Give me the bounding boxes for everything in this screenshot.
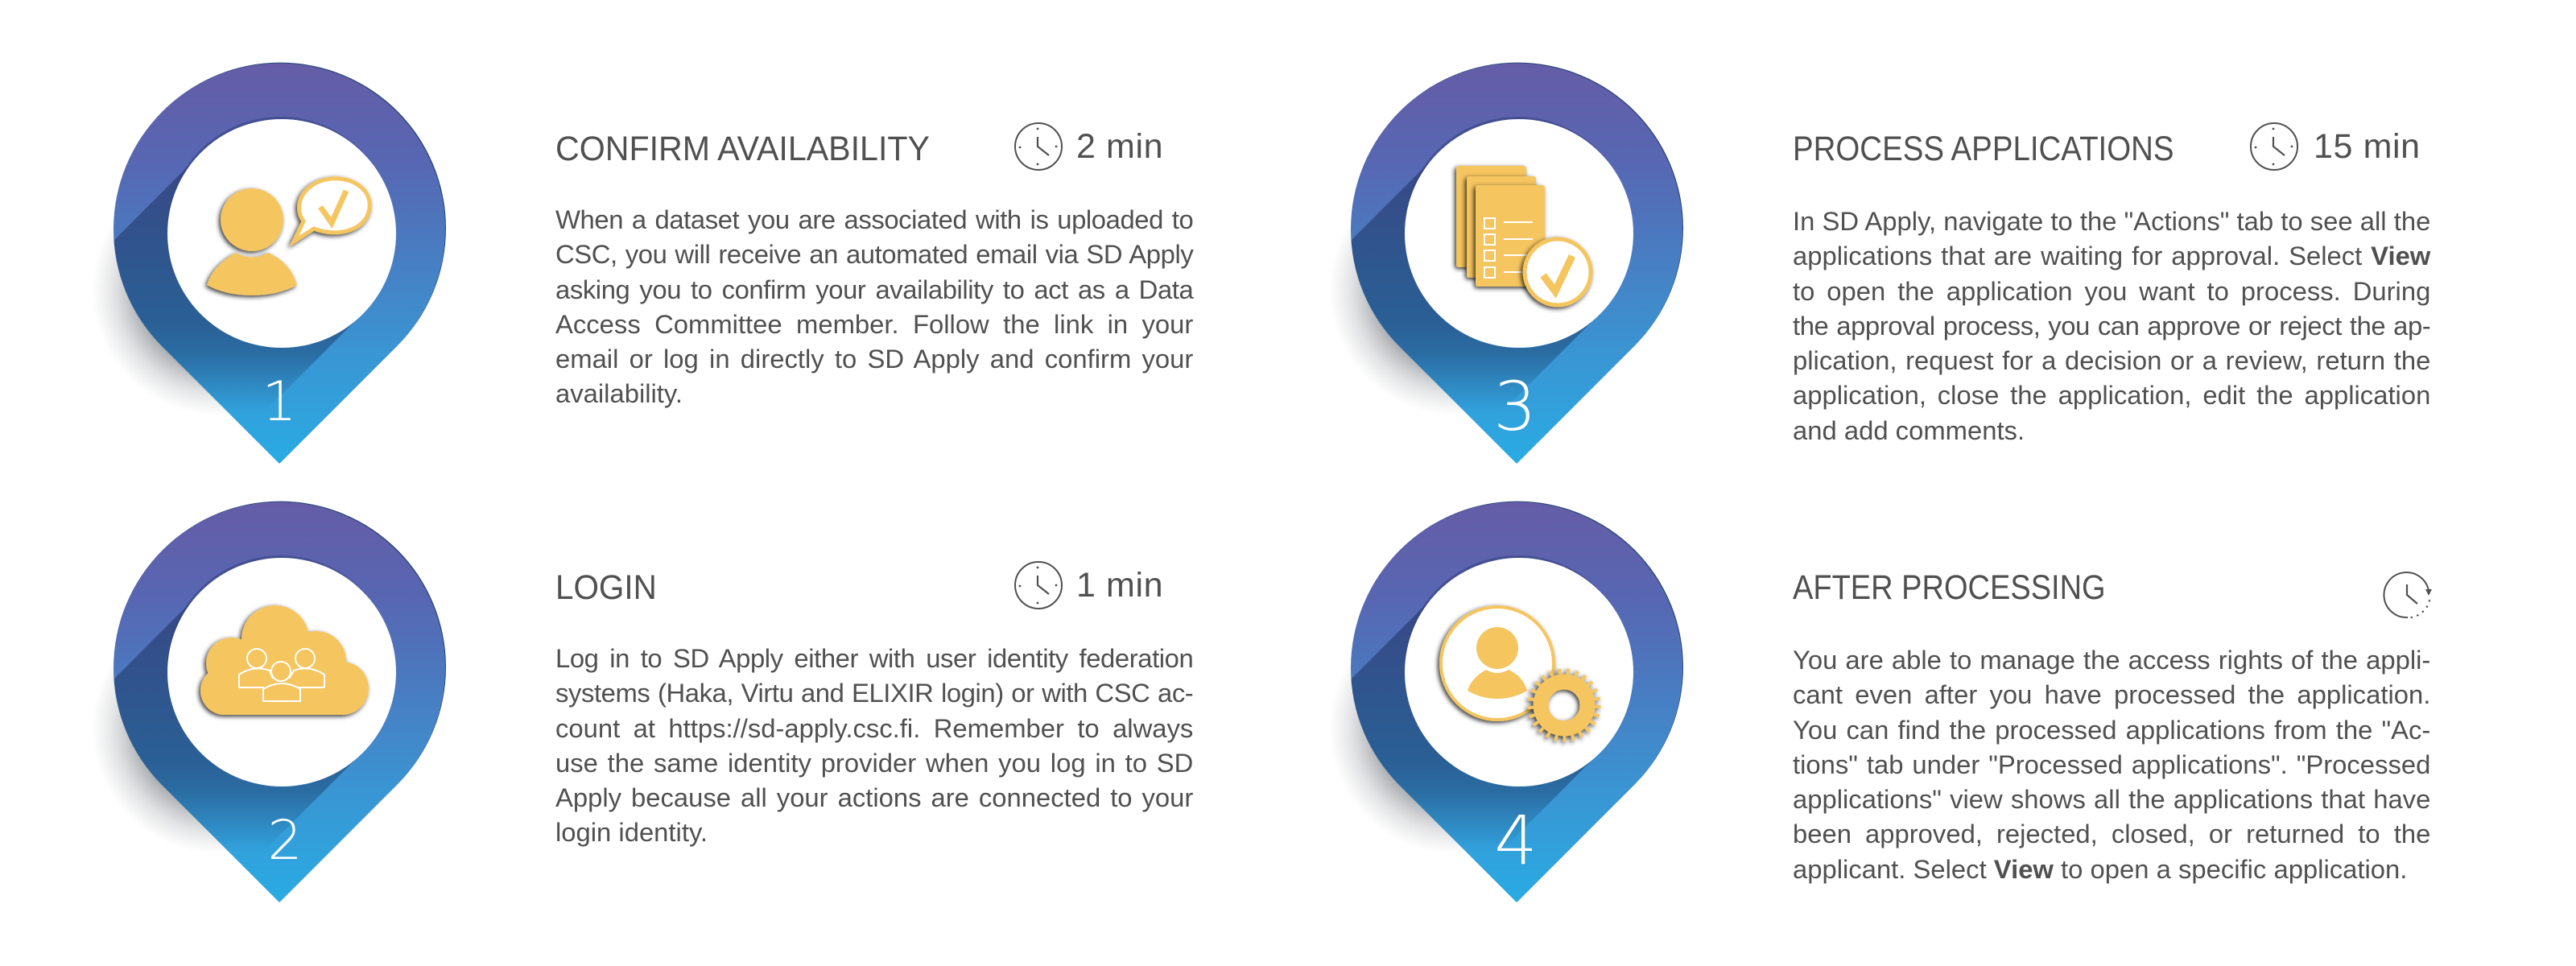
heading: LOGIN — [555, 568, 657, 607]
text block: plication, request for a decision or a review, return the — [1793, 346, 2430, 375]
text block: You can find the processed applications from the "Ac- — [1793, 716, 2430, 745]
number 1: 1 — [262, 370, 297, 434]
heading: AFTER PROCESSING — [1793, 568, 2106, 607]
heading: PROCESS APPLICATIONS — [1793, 130, 2174, 168]
time estimate: 2 min — [1076, 127, 1163, 166]
pin: step 2 — [98, 501, 446, 902]
text block: email or log in directly to SD Apply and confirm your — [555, 345, 1193, 374]
pin: step 4 — [1336, 501, 1683, 902]
text block: systems (Haka, Virtu and ELIXIR login) or with CSC ac- — [555, 679, 1193, 708]
text block: applicant. Select View to open a specific application. — [1793, 855, 2407, 884]
icon: cloud with people — [200, 605, 369, 715]
text block: In SD Apply, navigate to the "Actions" tab to see all the — [1793, 207, 2430, 236]
icon: clock — [1014, 122, 1063, 171]
text block: count at https://sd-apply.csc.fi. Remember to always — [555, 714, 1193, 743]
heading: CONFIRM AVAILABILITY — [555, 130, 930, 168]
panel: step 1 confirm availability — [98, 63, 1194, 464]
text block: Log in to SD Apply either with user identity federation — [555, 644, 1193, 673]
text block: Apply because all your actions are connected to your — [555, 783, 1193, 812]
number 2: 2 — [267, 809, 303, 873]
text block: and add comments. — [1793, 416, 2025, 445]
text block — [555, 644, 1193, 847]
panel: step 3 process applications — [1336, 63, 2431, 464]
text block: been approved, rejected, closed, or returned to the — [1793, 819, 2430, 848]
text block: login identity. — [555, 818, 708, 847]
text block: the approval process, you can approve or reject the ap- — [1793, 312, 2430, 341]
time estimate: 15 min — [2314, 127, 2421, 166]
icon: documents with check mark — [1456, 166, 1591, 305]
text block: to open the application you want to process. During — [1793, 277, 2430, 306]
text block — [1793, 207, 2431, 445]
text block: asking you to confirm your availability to act as a Data — [555, 275, 1193, 304]
text block — [555, 205, 1194, 408]
text block: Access Committee member. Follow the link in your — [555, 310, 1193, 339]
number 3: 3 — [1493, 367, 1537, 446]
text block: You are able to manage the access rights of the appli- — [1793, 646, 2430, 675]
icon: clock — [1014, 561, 1063, 609]
icon: user with gear — [1441, 607, 1598, 739]
pin: step 3 — [1336, 63, 1683, 464]
panel: step 4 after processing — [1336, 501, 2432, 902]
icon: person with speech bubble — [207, 179, 369, 295]
text block: tions" tab under "Processed applications". "Processed — [1793, 750, 2430, 779]
text block — [1793, 646, 2430, 884]
text block: application, close the application, edit the application — [1793, 381, 2430, 410]
icon: clock — [2250, 122, 2298, 171]
panel: step 2 login — [98, 501, 1193, 902]
text block: applications that are waiting for approval. Select View — [1793, 242, 2430, 270]
text block: applications" view shows all the applications that have — [1793, 785, 2430, 814]
icon: clock with open dotted arc — [2383, 572, 2432, 618]
pin: step 1 — [98, 63, 446, 464]
text block: availability. — [555, 379, 683, 408]
number 4: 4 — [1494, 801, 1538, 880]
text block: When a dataset you are associated with is uploaded to — [555, 205, 1193, 234]
time estimate: 1 min — [1076, 566, 1163, 605]
text block: use the same identity provider when you log in to SD — [555, 749, 1193, 778]
text block: cant even after you have processed the application. — [1793, 680, 2430, 709]
text block: CSC, you will receive an automated email via SD Apply — [555, 240, 1193, 269]
